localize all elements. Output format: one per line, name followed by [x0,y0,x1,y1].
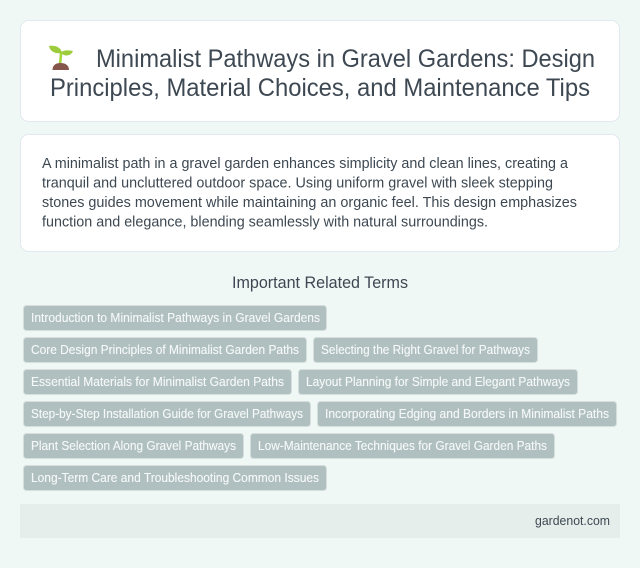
tag list [24,306,616,490]
tag: layout planning [298,370,578,394]
tag: selecting gravel [314,338,538,362]
tag: introduction [24,306,326,330]
tag: selecting gravel: Selecting the Right Gravel for Pathways [321,343,530,357]
title [50,45,595,102]
tag: edging and borders: Incorporating Edging and Borders in Minimalist Paths [325,407,609,421]
tag: core design principles: Core Design Principles of Minimalist Garden Paths [31,343,299,357]
footer source: gardenot.com [535,513,610,528]
text block: introduction paragraph [42,155,577,230]
tag: essential materials [24,370,292,394]
tag: long-term care [24,466,326,490]
tag: low-maintenance techniques: Low-Maintenance Techniques for Gravel Garden Paths [258,439,547,453]
tag: essential materials: Essential Materials for Minimalist Garden Paths [31,375,284,389]
tag: core design principles [24,338,306,362]
text block: introduction paragraph: A minimalist path in a gravel garden enhances simplicity and clean lines, creating a [42,155,569,172]
text block: introduction paragraph: tranquil and uncluttered outdoor space. Using uniform gravel with sleek stepping [42,174,553,192]
tag: plant selection: Plant Selection Along Gravel Pathways [31,439,236,453]
panel: introduction [20,134,620,252]
footer [20,504,620,538]
icon: seedling [49,46,73,70]
text block: introduction paragraph: stones guides movement while maintaining an organic feel. This design emphasizes [42,194,577,211]
tag: long-term care: Long-Term Care and Troubleshooting Common Issues [31,471,319,485]
tag: edging and borders [318,402,616,426]
tag: installation guide: Step-by-Step Installation Guide for Gravel Pathways [31,407,303,421]
heading: important related terms: Important Related Terms [232,274,408,292]
tag: low-maintenance techniques [250,434,554,458]
tag: installation guide [24,402,310,426]
text block: introduction paragraph: function and elegance, blending seamlessly with natural surroundings. [42,214,488,230]
tag: layout planning: Layout Planning for Simple and Elegant Pathways [306,375,570,389]
title: Minimalist Pathways in Gravel Gardens: Design [96,45,595,73]
panel: title card [20,20,620,122]
tag: introduction: Introduction to Minimalist Pathways in Gravel Gardens [31,311,320,325]
title: Principles, Material Choices, and Maintenance Tips [50,74,590,102]
tag: plant selection [24,434,244,458]
